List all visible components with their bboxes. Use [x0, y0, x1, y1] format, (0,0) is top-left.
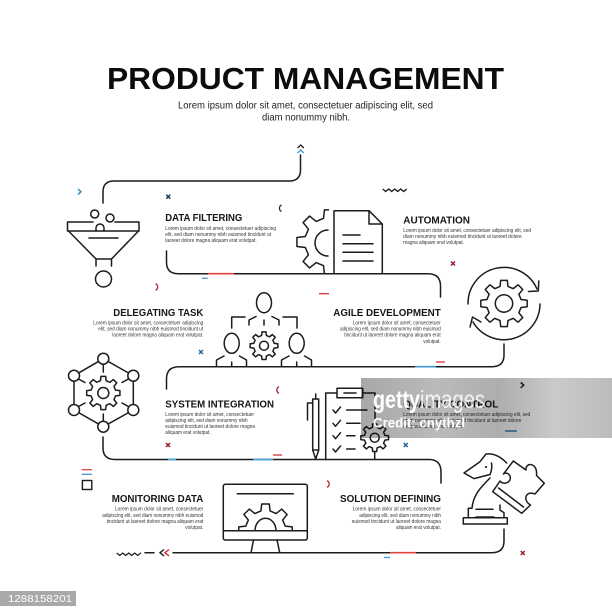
- panel: quality control: Lorem ipsum dolor sit amet, consectetuer adipiscing elit, sed: [403, 412, 531, 418]
- panel: system integration: aliquam erat volutpat.: [165, 430, 211, 436]
- panel: solution defining: aliquam erat volutpat.: [396, 525, 441, 531]
- panel: system integration: adipiscing elit, sed diam nonummy nibh: [165, 418, 248, 424]
- panel: solution defining: SOLUTION DEFINING: [340, 493, 441, 505]
- panel: agile development: volutpat.: [423, 339, 441, 345]
- panel: quality control: QUALITY CONTROL: [403, 398, 499, 410]
- panel: automation: magna aliquam erat volutpat.: [403, 240, 464, 246]
- panel: system integration: SYSTEM INTEGRATION: [165, 398, 274, 410]
- panel: quality control: magna aliquam erat volutpat.: [403, 424, 464, 430]
- decorative accents: [78, 189, 525, 558]
- panel: automation: [403, 214, 531, 246]
- watermark band: images: [420, 386, 485, 414]
- panel: monitoring data: volutpat.: [185, 525, 203, 531]
- subtitle: diam nonummy nibh.: [262, 113, 350, 124]
- panel: system integration: Lorem ipsum dolor sit amet, consectetuer: [165, 412, 254, 418]
- icon: clipboard, pen and gear: [308, 388, 389, 460]
- panel: solution defining: adipiscing elit, sed diam nonummy nibh: [359, 513, 441, 519]
- panel: monitoring data: MONITORING DATA: [112, 493, 204, 505]
- subtitle: Lorem ipsum dolor sit amet, consectetuer adipiscing elit, sed: [178, 100, 433, 111]
- watermark band: Credit: cnythzl: [373, 414, 465, 430]
- panel: agile development: [333, 307, 441, 345]
- panel: solution defining: [340, 493, 441, 531]
- legend accent: stripes and square: [82, 470, 92, 490]
- icon: hexagon network: [68, 353, 139, 432]
- panel: system integration: [165, 398, 274, 436]
- panel: delegating task: elit, sed diam nonummy nibh euismod tincidunt ut: [98, 326, 204, 332]
- icon: funnel: [68, 210, 139, 287]
- image id tag: [0, 591, 76, 606]
- panel: automation: AUTOMATION: [403, 214, 470, 226]
- panel: agile development: tincidunt ut laoreet dolore magna aliquam erat: [344, 332, 441, 338]
- panel: solution defining: euismod tincidunt ut laoreet dolore magna: [352, 519, 441, 525]
- panel: agile development: adipiscing elit, sed diam nonummy nibh euismod: [340, 326, 441, 332]
- panel: quality control: [403, 398, 531, 430]
- panel: system integration: euismod tincidunt ut laoreet dolore magna: [165, 424, 255, 430]
- icon: gear and document: [297, 210, 382, 274]
- watermark band: [361, 378, 612, 438]
- panel: automation: Lorem ipsum dolor sit amet, consectetuer adipiscing elit, sed: [403, 228, 531, 234]
- title: PRODUCT MANAGEMENT: [107, 62, 504, 96]
- panel: automation: diam nonummy nibh euismod tincidunt ut laoreet dolore: [403, 234, 522, 240]
- panel: data filtering: [165, 212, 276, 244]
- panel: data filtering: DATA FILTERING: [165, 212, 242, 224]
- panel: agile development: AGILE DEVELOPMENT: [333, 307, 441, 319]
- panel: agile development: Lorem ipsum dolor sit amet, consectetuer: [353, 320, 441, 326]
- panel: delegating task: DELEGATING TASK: [113, 307, 204, 319]
- image id tag: 1288158201: [8, 594, 72, 605]
- panel: data filtering: Lorem ipsum dolor sit amet, consectetuer adipiscing: [165, 226, 276, 232]
- icon: chess knight and puzzle piece: [463, 454, 544, 524]
- arrow: path start chevrons: [298, 145, 304, 153]
- panel: monitoring data: [102, 493, 204, 531]
- panel: delegating task: laoreet dolore magna aliquam erat volutpat.: [112, 332, 203, 338]
- panel: data filtering: laoreet dolore magna aliquam erat volutpat.: [165, 238, 257, 244]
- subtitle: [178, 100, 433, 124]
- arrow: path end chevrons: [160, 550, 169, 556]
- panel: monitoring data: tincidunt ut laoreet dolore magna aliquam erat: [107, 519, 204, 525]
- icon: monitor with gear: [223, 484, 307, 557]
- icon: gear cycle: [468, 267, 540, 340]
- panel: monitoring data: adipiscing elit, sed diam nonummy nibh euismod: [102, 513, 203, 519]
- panel: solution defining: Lorem ipsum dolor sit amet, consectetuer: [353, 506, 441, 512]
- panel: data filtering: elit, sed diam nonummy nibh euismod tincidunt ut: [165, 232, 272, 238]
- process path: [103, 155, 504, 553]
- icon: team and gear: [216, 293, 312, 366]
- panel: delegating task: [93, 307, 204, 338]
- watermark band: getty: [373, 386, 420, 414]
- panel: quality control: diam nonummy nibh euismod tincidunt ut laoreet dolore: [403, 418, 521, 424]
- path colour accents: [168, 274, 436, 553]
- panel: monitoring data: Lorem ipsum dolor sit amet, consectetuer: [115, 506, 204, 512]
- panel: delegating task: Lorem ipsum dolor sit amet, consectetuer adipiscing: [93, 320, 203, 326]
